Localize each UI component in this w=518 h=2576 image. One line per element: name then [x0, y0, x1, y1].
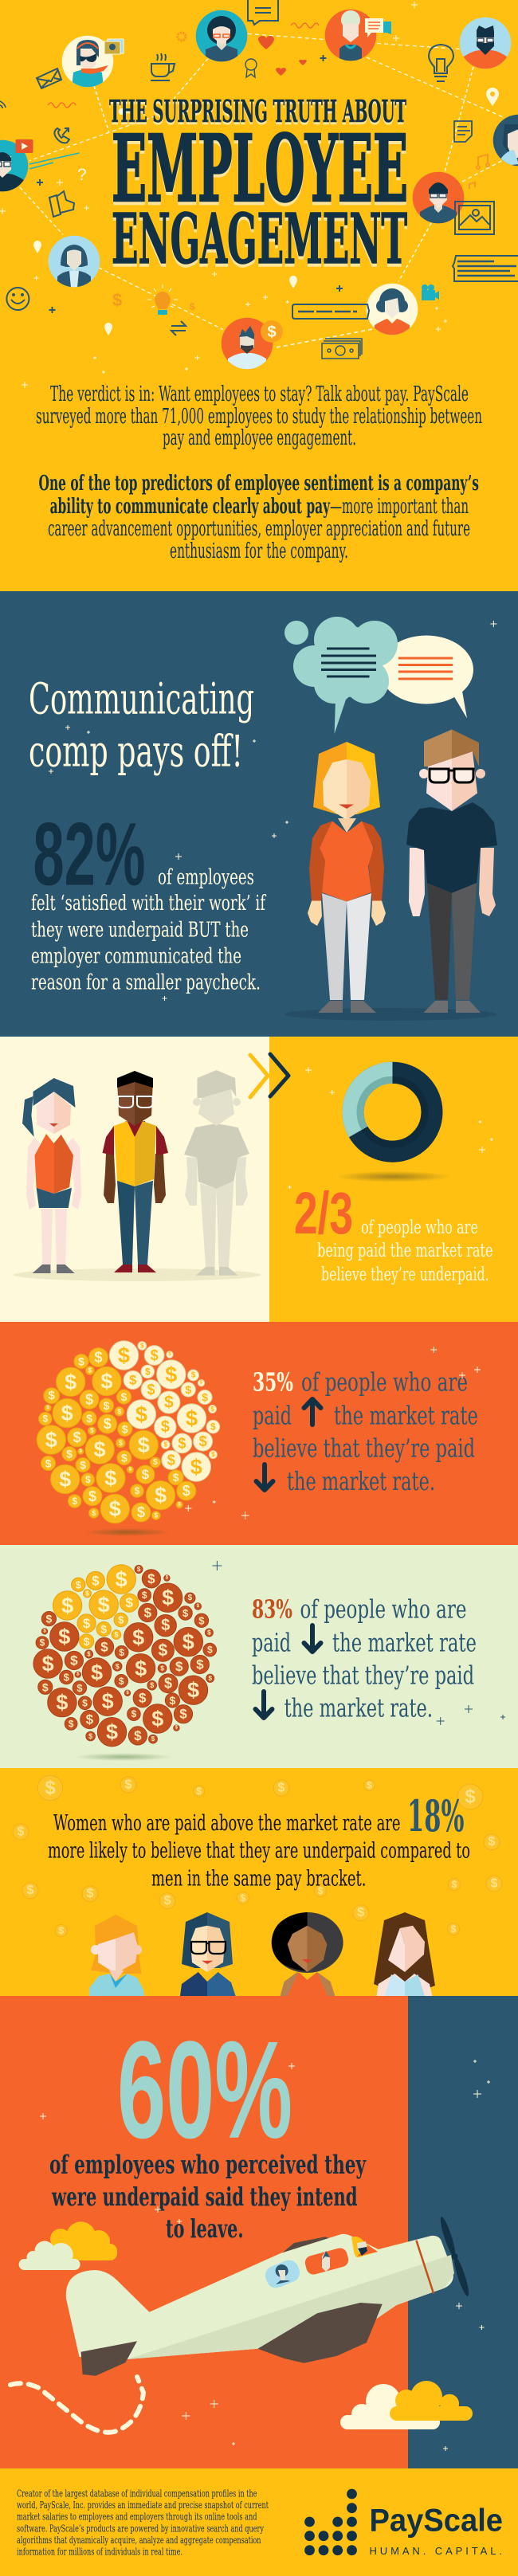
yellow coins: $	[59, 1467, 71, 1491]
yellow coins: $	[100, 1369, 112, 1393]
brick coins: $	[147, 1571, 155, 1586]
stat text	[252, 1594, 477, 1723]
stat description: employer communicated the	[31, 944, 241, 968]
avatar: right edge woman	[492, 114, 518, 167]
icon: money bill	[322, 339, 362, 359]
company description: software. PayScale’s products are powered by innovative search and query	[17, 2522, 265, 2534]
brick coins: $	[126, 1691, 129, 1696]
stat description: felt ‘satisfied with their work’ if	[31, 892, 267, 916]
brick coins: $	[88, 1732, 92, 1740]
cream coins: $	[211, 1451, 215, 1458]
icon: chat bubble	[248, 0, 278, 25]
cream coins: $	[161, 1418, 170, 1436]
cream coins: $	[147, 1382, 155, 1398]
icon: wifi	[0, 101, 6, 108]
brick coins: $	[164, 1676, 172, 1692]
airplane window: woman	[262, 2257, 303, 2291]
brick coins: $	[42, 1652, 54, 1676]
yellow coins: $	[100, 1622, 107, 1635]
brick coins: $	[69, 1718, 74, 1729]
stars	[49, 621, 496, 1001]
brick coins: $	[102, 1689, 114, 1713]
man figure	[406, 730, 497, 1013]
company description	[17, 2487, 269, 2558]
cream cloud	[19, 2241, 80, 2270]
arrow down	[257, 1464, 273, 1490]
brick coins: $	[144, 1605, 152, 1621]
company description: Creator of the largest database of individual compensation profiles in the	[17, 2487, 257, 2499]
brick coins: $	[131, 1708, 137, 1719]
stat text	[48, 1790, 470, 1892]
avatar: man with beard and dollar bubble	[221, 317, 273, 370]
icon: video play	[16, 139, 33, 153]
yellow coins: $	[118, 1614, 124, 1625]
stat 60%: 60%	[117, 2012, 292, 2167]
airplane window: pilot	[351, 2237, 378, 2257]
yellow coins: $	[116, 1567, 128, 1591]
faded coins: $	[491, 1877, 498, 1890]
brick coins: $	[166, 1576, 169, 1581]
faded coins: $	[196, 1786, 202, 1797]
yellow coins: $	[104, 1416, 112, 1432]
icon: coffee cup	[151, 53, 175, 80]
cream coins: $	[167, 1452, 175, 1468]
stat text: the market rate.	[287, 1466, 435, 1496]
title	[109, 94, 408, 283]
faded coins: $	[125, 1778, 132, 1791]
faded coins: $	[87, 1887, 94, 1900]
yellow coins: $	[42, 1413, 48, 1425]
yellow coins: $	[117, 1407, 121, 1415]
stars	[185, 1347, 481, 1519]
logo: PayScale	[304, 2489, 503, 2557]
stat description	[49, 2150, 367, 2244]
yellow coins: $	[45, 1457, 52, 1469]
brick coins: $	[64, 1672, 70, 1683]
brick coins: $	[182, 1607, 189, 1619]
brick coins: $	[197, 1604, 200, 1609]
yellow coins: $	[153, 1458, 158, 1467]
yellow coins: $	[154, 1512, 158, 1519]
stars	[212, 1561, 505, 1725]
yellow coins: $	[84, 1635, 90, 1648]
yellow coins: $	[104, 1466, 116, 1490]
yellow coins: $	[104, 1399, 110, 1412]
yellow coins: $	[61, 1401, 73, 1425]
yellow coins: $	[109, 1496, 121, 1520]
panel: two thirds	[250, 1037, 518, 1322]
yellow coins: $	[135, 1485, 140, 1496]
cream coins: $	[135, 1402, 147, 1426]
coin shadow	[84, 1528, 171, 1536]
cream coins: $	[164, 1393, 174, 1412]
brick coins: $	[207, 1629, 211, 1637]
yellow coins: $	[85, 1391, 93, 1407]
dashed flight trail	[10, 2377, 143, 2433]
woman one	[89, 1915, 144, 1996]
brick coins: $	[150, 1681, 154, 1689]
company description: world, PayScale, Inc. provides an immediate and precise snapshot of current	[17, 2499, 269, 2511]
faded coins: $	[58, 1925, 64, 1936]
donut shadow	[336, 1171, 450, 1182]
faded coins: $	[465, 1786, 476, 1807]
stat description	[31, 865, 267, 995]
stat 2/3: 2/3	[294, 1180, 353, 1246]
yellow coins: $	[92, 1509, 96, 1517]
brick coins: $	[132, 1625, 144, 1649]
yellow coins: $	[45, 1428, 57, 1452]
icon: thumbs up	[49, 191, 74, 217]
heading: Communicating	[29, 674, 254, 724]
brick coins: $	[188, 1594, 193, 1602]
yellow coins: $	[173, 1471, 179, 1484]
coin ball	[33, 1565, 217, 1747]
icon: chat bubbles	[365, 18, 391, 37]
faded coins	[13, 1775, 502, 1936]
icon: smiley	[6, 288, 29, 310]
brick coins: $	[170, 1694, 176, 1707]
cream coins: $	[118, 1343, 130, 1367]
woman four	[374, 1912, 435, 1996]
stat description: of employees	[158, 865, 254, 889]
brick coins: $	[151, 1707, 163, 1731]
icon: text box	[292, 304, 369, 319]
yellow coins: $	[129, 1468, 132, 1472]
yellow coins: $	[90, 1427, 94, 1434]
icon: signal lines	[29, 153, 80, 169]
cream coins: $	[165, 1362, 177, 1386]
brick coins: $	[151, 1735, 155, 1743]
cream coins: $	[178, 1435, 186, 1451]
yellow coins: $	[83, 1616, 91, 1631]
cream coins: $	[140, 1342, 144, 1350]
panel: 60 percent	[0, 1996, 518, 2468]
heading: comp pays off!	[29, 727, 243, 776]
faded coins: $	[452, 1879, 457, 1890]
yellow coins: $	[125, 1595, 133, 1610]
brick coins: $	[187, 1678, 199, 1702]
stat description: of employees who perceived they	[49, 2150, 367, 2180]
yellow coins: $	[182, 1483, 190, 1499]
stat text: the market rate.	[285, 1692, 433, 1723]
brick coins: $	[116, 1662, 120, 1670]
cream coins: $	[210, 1406, 214, 1413]
cream coins: $	[202, 1391, 208, 1404]
brick coins: $	[82, 1697, 88, 1708]
yellow coins: $	[138, 1433, 150, 1457]
icon: envelope	[37, 69, 61, 88]
brick coins: $	[160, 1664, 164, 1672]
brick coins: $	[70, 1653, 78, 1668]
stat 82%: 82%	[33, 805, 145, 904]
yellow coins: $	[73, 1429, 81, 1445]
yellow coins: $	[121, 1390, 128, 1403]
plus marks	[37, 55, 343, 313]
yellow coins: $	[155, 1484, 167, 1508]
stars	[0, 2, 447, 388]
brick coins: $	[58, 1625, 70, 1649]
intro text	[36, 382, 482, 563]
brick coins: $	[100, 1640, 108, 1654]
icon: dollar signs: $	[190, 301, 195, 312]
intro text: pay and employee engagement.	[163, 426, 356, 450]
brick coins: $	[196, 1657, 204, 1672]
brick coins: $	[162, 1586, 174, 1610]
panel: 83 percent	[0, 1545, 518, 1768]
cream coins: $	[191, 1370, 196, 1380]
brick coins: $	[207, 1645, 213, 1656]
faded coins: $	[451, 1923, 457, 1935]
panel: footer	[0, 2468, 518, 2576]
cream coins: $	[129, 1372, 137, 1388]
brick coins: $	[137, 1566, 141, 1573]
brick coins: $	[182, 1630, 194, 1654]
icon: document	[454, 121, 472, 142]
faded coins: $	[240, 1892, 245, 1904]
heading	[29, 674, 254, 776]
panel: header	[0, 0, 518, 591]
arrow down	[304, 1625, 320, 1652]
yellow cloud	[50, 2221, 117, 2260]
brick coins: $	[135, 1657, 147, 1680]
avatar: curly haired woman	[366, 283, 418, 335]
yellow coins: $	[49, 1389, 56, 1402]
speech bubble: teal cloud	[285, 617, 398, 734]
yellow coins: $	[66, 1448, 73, 1461]
airplane window: man	[304, 2246, 350, 2276]
brick coins: $	[77, 1672, 80, 1677]
propeller	[438, 2216, 471, 2297]
brick coins: $	[119, 1676, 124, 1687]
airplane	[66, 2216, 471, 2376]
cream coins: $	[163, 1441, 167, 1449]
stat text: 83%	[252, 1594, 292, 1625]
coin ball	[37, 1341, 220, 1523]
faded coins: $	[164, 1894, 171, 1907]
woman with teal hair	[22, 1078, 81, 1273]
avatar: woman with sunglasses	[61, 35, 114, 88]
cream coins: $	[186, 1406, 198, 1430]
yellow coins: $	[88, 1488, 96, 1504]
brick coins: $	[175, 1726, 179, 1731]
faded coins: $	[357, 1906, 364, 1919]
icon: image frame	[455, 202, 494, 234]
yellow coins: $	[78, 1355, 84, 1368]
small network line	[277, 329, 373, 347]
yellow coins: $	[94, 1437, 106, 1461]
brick coins: $	[179, 1707, 187, 1722]
yellow coins: $	[119, 1439, 123, 1447]
stat description: they were underpaid BUT the	[31, 918, 249, 942]
avatar: woman in blazer	[48, 235, 100, 288]
icon: light bulb outline	[429, 45, 453, 81]
brick coins: $	[86, 1711, 94, 1727]
stat text: 18%	[407, 1790, 464, 1841]
yellow coins	[37, 1348, 196, 1523]
cream cloud lower	[340, 2384, 440, 2429]
icon: dollar bubble	[261, 320, 283, 343]
icon: message box with lines	[453, 256, 518, 281]
ground shadow	[285, 1008, 496, 1021]
cream coins: $	[210, 1421, 216, 1433]
brick coins: $	[159, 1641, 168, 1660]
faded coins: $	[318, 1885, 324, 1896]
cream coins: $	[200, 1381, 203, 1386]
yellow coins: $	[61, 1594, 73, 1617]
yellow coins: $	[137, 1504, 145, 1520]
stat text: 35%	[253, 1367, 293, 1398]
brick coins: $	[40, 1637, 45, 1649]
yellow coins: $	[80, 1449, 83, 1454]
arrow up	[304, 1399, 320, 1425]
yellow coins: $	[85, 1590, 89, 1597]
intro text: ability to communicate clearly about pay	[50, 495, 331, 519]
brick coins: $	[91, 1660, 103, 1684]
icon: video camera	[422, 284, 439, 300]
arrow down	[255, 1692, 273, 1718]
icon: music notes	[469, 155, 489, 189]
man with vest	[102, 1071, 168, 1272]
company description: algorithms that dynamically acquire, analyze and aggregate compensation	[17, 2534, 261, 2546]
icon: dollar signs	[112, 290, 195, 312]
brick coins: $	[46, 1613, 53, 1625]
yellow coins: $	[88, 1367, 92, 1374]
avatar: man with glasses	[412, 171, 465, 224]
stat text	[253, 1367, 478, 1496]
network dashed lines	[20, 33, 504, 330]
icon: exchange arrows	[171, 321, 186, 335]
yellow coins	[53, 1565, 139, 1649]
company description: market salaries to employees and employers through its online tools and	[17, 2511, 257, 2523]
coin shadow	[74, 1753, 173, 1761]
yellow coins: $	[142, 1467, 150, 1482]
faded coins: $	[367, 1780, 372, 1791]
icon: glowing bulb	[147, 284, 178, 315]
faded coins: $	[45, 1777, 56, 1799]
icon: squiggles	[48, 23, 319, 108]
stat description: to leave.	[166, 2213, 244, 2244]
icon: dollar bubble: $	[267, 323, 277, 341]
cream coins: $	[185, 1383, 191, 1396]
brick coins: $	[119, 1647, 124, 1658]
cream coins: $	[145, 1366, 151, 1377]
cream coins: $	[151, 1347, 159, 1363]
donut chart	[353, 1072, 432, 1151]
stat text: paid	[252, 1627, 291, 1657]
brick coins: $	[43, 1629, 46, 1633]
yellow coins: $	[114, 1631, 118, 1639]
faded coins: $	[27, 1884, 34, 1897]
stat text: paid	[253, 1400, 292, 1430]
stars	[288, 1067, 493, 1189]
icon: stamp	[104, 39, 124, 54]
yellow coins: $	[72, 1496, 77, 1507]
panel: people illustration	[0, 1037, 269, 1322]
yellow coins: $	[178, 1503, 181, 1508]
yellow coins: $	[94, 1350, 103, 1366]
cream coins	[109, 1341, 220, 1481]
brick coins: $	[77, 1682, 83, 1694]
icon: location pins	[33, 88, 499, 335]
company description: information for millions of individuals in real time.	[17, 2546, 182, 2558]
yellow cloud lower	[390, 2381, 473, 2421]
cream coins: $	[190, 1455, 202, 1479]
cream coins: $	[168, 1352, 171, 1357]
yellow coins: $	[92, 1573, 100, 1588]
icon: dollar signs: $	[112, 290, 122, 310]
yellow coins: $	[65, 1370, 77, 1394]
brick coins: $	[175, 1659, 183, 1674]
faded coins: $	[278, 1782, 285, 1794]
brick coins: $	[56, 1691, 68, 1715]
icon: gear	[178, 33, 186, 41]
brick coins: $	[87, 1651, 91, 1657]
icon: phone	[54, 128, 69, 143]
icon: question mark: ?	[77, 166, 87, 184]
yellow coins: $	[46, 1406, 49, 1410]
avatar: older woman	[324, 9, 377, 61]
panel: communicating comp	[0, 591, 518, 1037]
yellow coins: $	[121, 1452, 128, 1464]
logo: PayScale: HUMAN. CAPITAL.	[370, 2545, 502, 2557]
icon: hearts	[258, 36, 307, 76]
brick coins: $	[208, 1675, 212, 1682]
yellow coins: $	[76, 1578, 82, 1590]
speech bubble: cream	[379, 636, 473, 719]
stat description	[317, 1217, 493, 1285]
stars	[40, 2060, 490, 2451]
brick coins: $	[106, 1720, 118, 1744]
yellow coins: $	[98, 1593, 110, 1617]
stat description: were underpaid said they intend	[51, 2182, 358, 2212]
faded coins: $	[489, 1835, 496, 1849]
avatar: bearded man	[459, 17, 512, 69]
faded man	[184, 1070, 249, 1276]
ground shadow	[14, 1268, 261, 1281]
yellow coins: $	[86, 1412, 92, 1425]
woman two	[180, 1912, 236, 1996]
yellow coins: $	[85, 1474, 91, 1485]
yellow coins: $	[80, 1458, 86, 1471]
brick coins: $	[161, 1617, 170, 1634]
avatar: man on left edge	[0, 139, 29, 192]
brick coins: $	[42, 1680, 49, 1693]
brick coins: $	[142, 1590, 147, 1601]
brick coins: $	[198, 1614, 205, 1626]
stat text: men in the same pay bracket.	[151, 1867, 366, 1892]
brick coins: $	[134, 1728, 142, 1743]
logo: PayScale: PayScale	[370, 2503, 503, 2539]
cream coins: $	[199, 1433, 207, 1449]
arrow chevrons	[250, 1054, 288, 1097]
avatar: woman with red glasses	[195, 10, 248, 62]
yellow coins: $	[122, 1423, 128, 1436]
panel: women pay gap	[0, 1768, 518, 1996]
brick coins: $	[139, 1691, 147, 1706]
icon: ribbon	[245, 59, 257, 77]
faded coins: $	[18, 1825, 25, 1839]
panel: 35 percent	[0, 1322, 518, 1545]
woman three	[272, 1912, 343, 1996]
stat description: reason for a smaller paycheck.	[31, 971, 261, 995]
intro text: enthusiasm for the company.	[170, 539, 348, 563]
brick coins	[33, 1565, 217, 1747]
woman figure	[308, 742, 386, 1013]
